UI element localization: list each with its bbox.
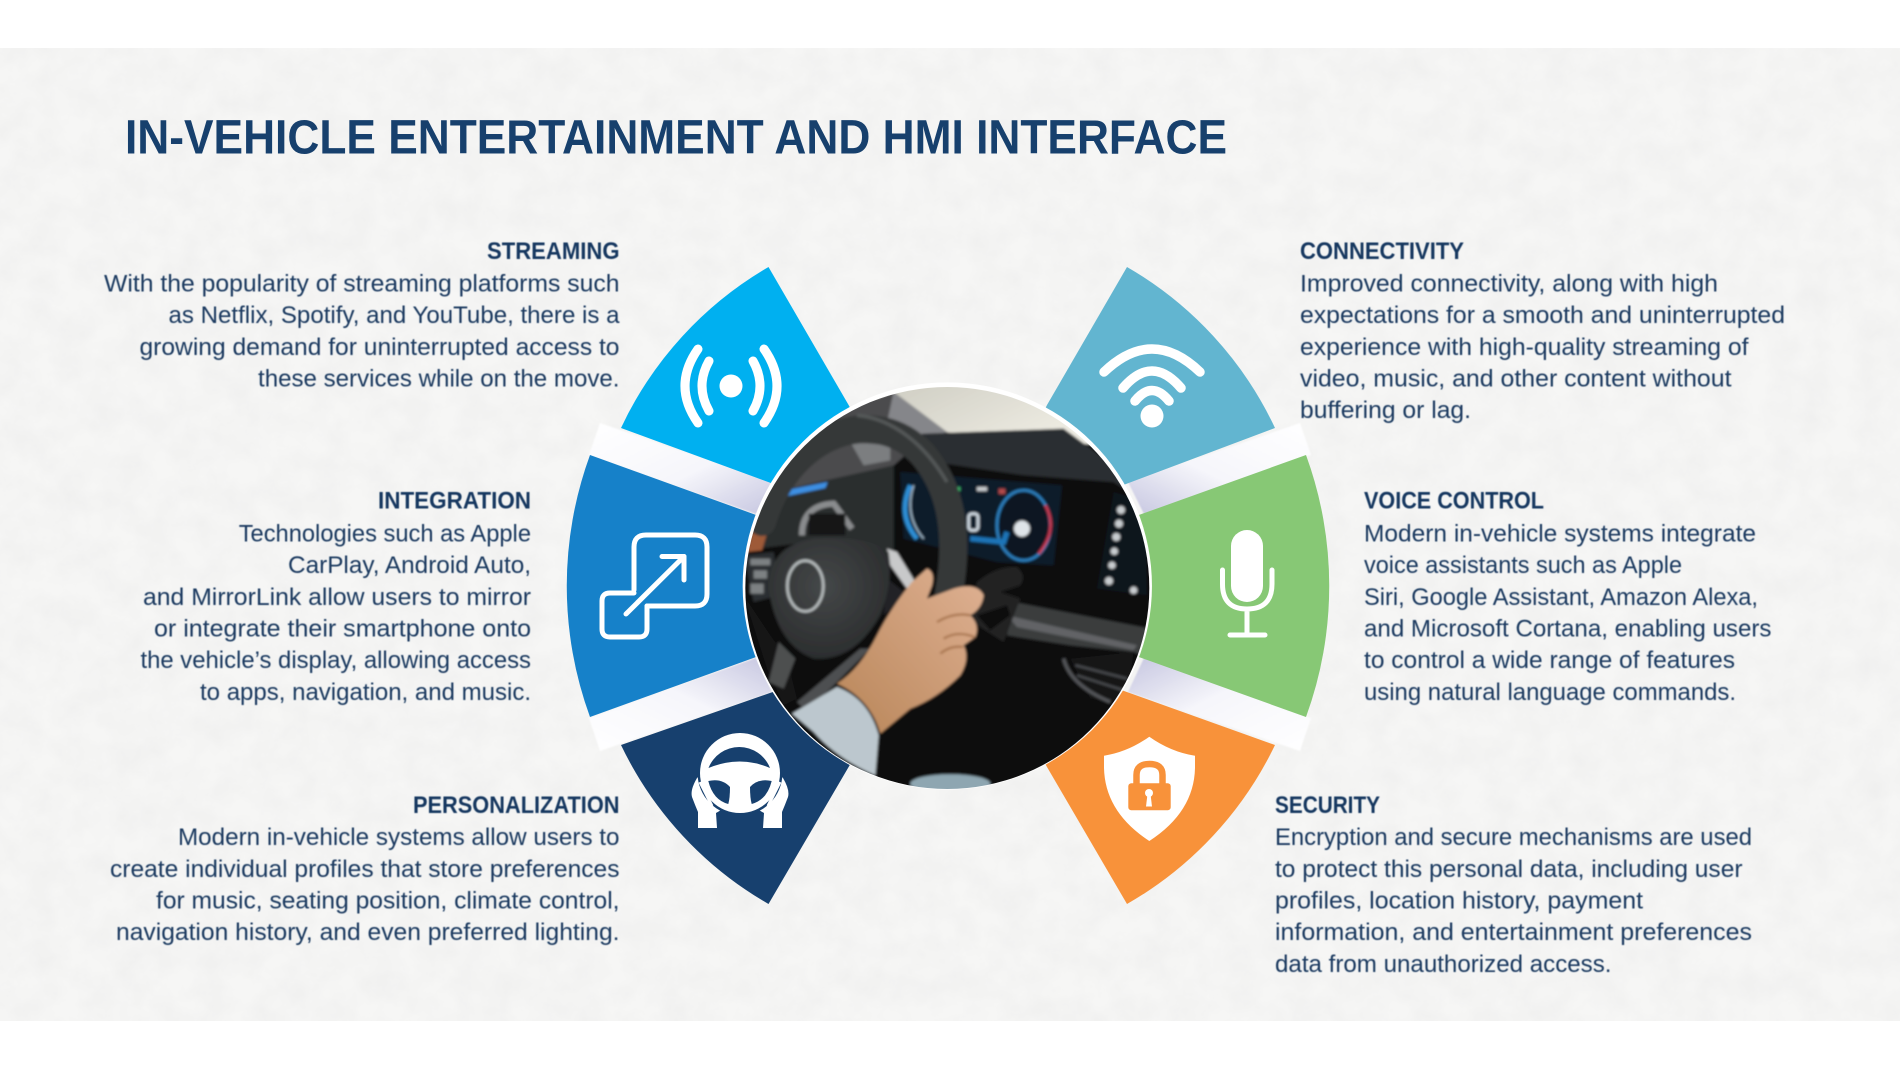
dash top <box>922 429 1134 495</box>
spokes and lower-left <box>746 600 797 704</box>
segment: connectivity <box>1000 267 1275 500</box>
text block: voice control: and Microsoft Cortana, enabling users <box>1364 616 1772 642</box>
text block: integration: and MirrorLink allow users to mirror <box>143 584 531 611</box>
sleeve <box>792 687 879 775</box>
text block: streaming <box>104 238 620 392</box>
text block: streaming: these services while on the move. <box>258 366 620 392</box>
icon: security shield with lock <box>1104 737 1195 841</box>
left panel and vent <box>757 465 894 555</box>
text block: voice control: Modern in-vehicle systems integrate <box>1364 521 1756 548</box>
text block: security: SECURITY <box>1275 792 1380 819</box>
title: IN-VEHICLE ENTERTAINMENT AND HMI INTERFACE <box>125 112 1227 164</box>
text block: personalization <box>110 792 620 946</box>
text block: security: information, and entertainment preferences <box>1275 919 1752 946</box>
steering wheel rim <box>762 429 953 595</box>
text block: streaming: growing demand for uninterrupted access to <box>140 334 620 361</box>
text block: personalization: for music, seating position, climate control, <box>156 888 620 914</box>
text block: connectivity: experience with high-quality streaming of <box>1300 334 1749 361</box>
text block: personalization: PERSONALIZATION <box>413 792 620 819</box>
text block: connectivity: CONNECTIVITY <box>1300 238 1464 265</box>
text block: streaming: With the popularity of streaming platforms such <box>104 270 620 298</box>
text block: voice control: Siri, Google Assistant, Amazon Alexa, <box>1364 584 1758 611</box>
text block: security: to protect this personal data, including user <box>1275 856 1743 883</box>
text block: personalization: Modern in-vehicle systems allow users to <box>178 824 620 851</box>
icon: broadcast signal <box>685 349 777 423</box>
screens <box>899 476 1126 592</box>
text block: connectivity: video, music, and other content without <box>1300 366 1732 392</box>
icon: steering wheel with hands <box>692 730 788 828</box>
text block: connectivity: buffering or lag. <box>1300 397 1471 424</box>
stalk <box>967 567 1023 642</box>
text block: voice control: voice assistants such as Apple <box>1364 552 1682 579</box>
text block: integration: INTEGRATION <box>378 488 531 515</box>
gap strips between segments <box>589 423 1311 751</box>
icon: wifi <box>1104 349 1200 428</box>
text block: integration: Technologies such as Apple <box>239 521 531 548</box>
lower dash <box>1007 602 1150 659</box>
steering hub <box>769 538 890 659</box>
text block: integration: to apps, navigation, and music. <box>200 679 531 706</box>
segment: personalization <box>621 680 900 904</box>
text block: integration: or integrate their smartphone onto <box>154 616 531 642</box>
text block: connectivity <box>1300 238 1785 424</box>
text block: streaming: STREAMING <box>487 238 620 265</box>
segment: voice control <box>1125 455 1329 717</box>
text block: security: profiles, location history, payment <box>1275 888 1643 914</box>
text block: voice control: VOICE CONTROL <box>1364 488 1544 515</box>
text block: integration: the vehicle’s display, allowing access <box>140 647 531 674</box>
text block: personalization: create individual profiles that store preferences <box>110 856 620 883</box>
text block: voice control: using natural language commands. <box>1364 679 1736 706</box>
text block: connectivity: expectations for a smooth and uninterrupted <box>1300 302 1785 329</box>
text block: personalization: navigation history, and even preferred lighting. <box>116 919 620 946</box>
hand <box>837 569 984 734</box>
text block: streaming: as Netflix, Spotify, and YouTube, there is a <box>168 302 620 329</box>
segment: security <box>1000 680 1275 904</box>
text block: voice control <box>1364 488 1772 706</box>
text block: voice control: to control a wide range of features <box>1364 647 1735 674</box>
icon: expand screens <box>602 535 707 637</box>
text block: security: Encryption and secure mechanisms are used <box>1275 824 1752 851</box>
windshield <box>876 387 1091 447</box>
text block: integration: CarPlay, Android Auto, <box>288 552 531 579</box>
center photo: driver hand on steering wheel <box>737 382 1160 795</box>
text block: connectivity: Improved connectivity, along with high <box>1300 270 1718 298</box>
segment: integration <box>567 455 770 717</box>
segment: streaming <box>621 267 900 500</box>
text block: integration <box>140 488 531 706</box>
right screen <box>1097 492 1147 595</box>
text block: security: data from unauthorized access. <box>1275 951 1612 978</box>
icon: microphone <box>1222 530 1272 635</box>
text block: security <box>1275 792 1752 978</box>
